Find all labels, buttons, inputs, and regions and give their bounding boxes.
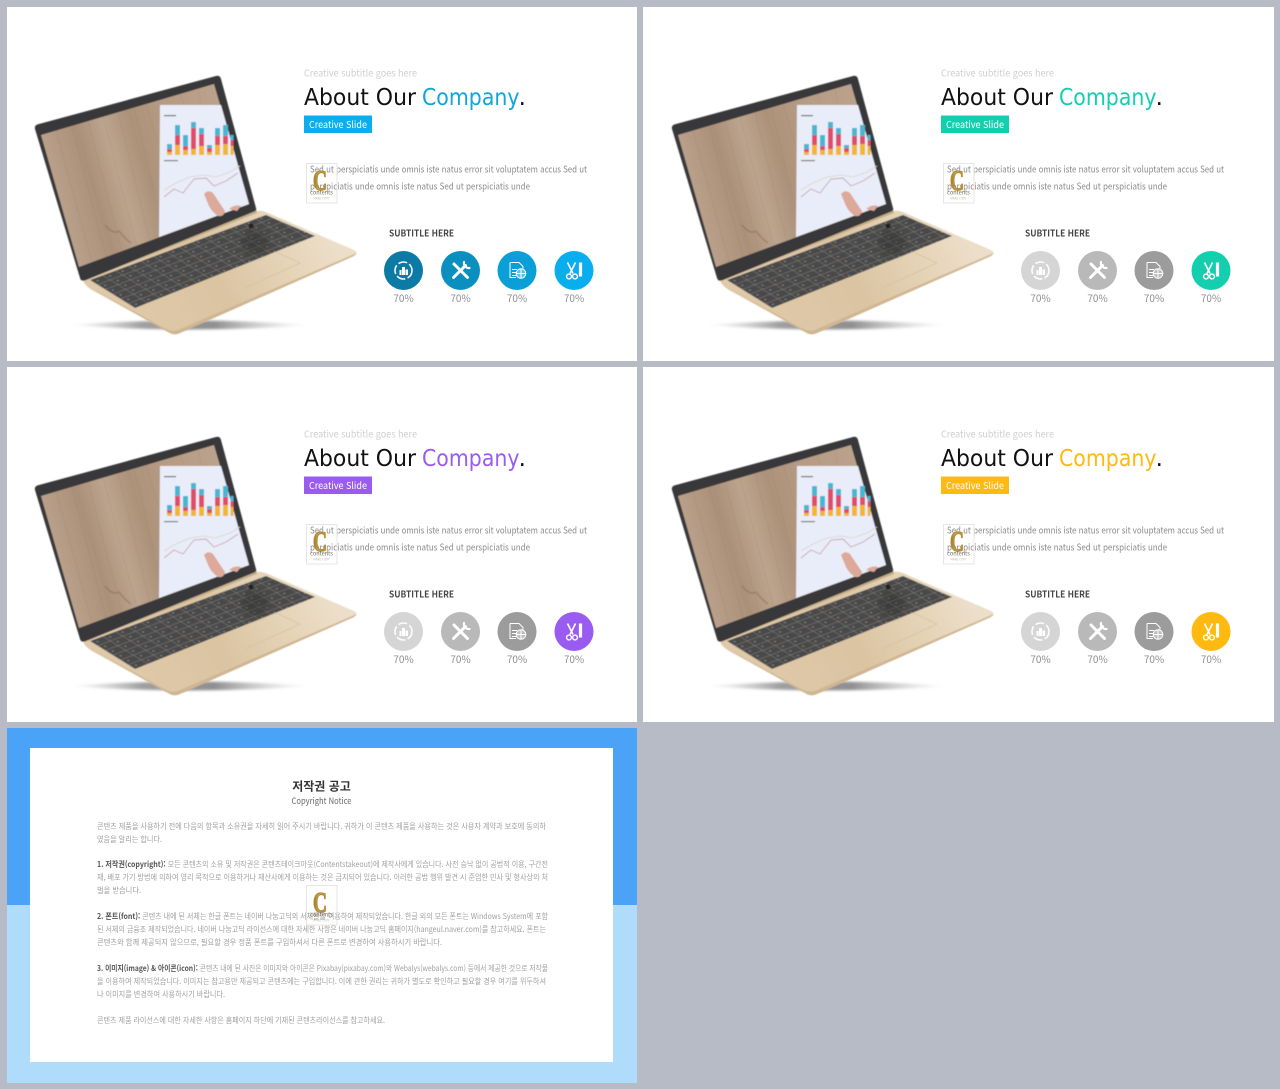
- icon: scissors: [1192, 251, 1230, 305]
- icon: scissors: 70%: [1201, 651, 1221, 666]
- heading: [941, 83, 1163, 111]
- notice section 2: [97, 911, 548, 948]
- notice section 3: 3. 이미지(image) & 아이콘(icon): 콘텐츠 내에 된 사진은 이미지와 아이콘은 Pixabay(pixabay.com)와 Webalys(webalys.com) 등에서 제공한 것으로 저작물: [97, 963, 548, 974]
- icon: document globe: 70%: [507, 290, 527, 305]
- subheading: SUBTITLE HERE: [389, 226, 454, 240]
- heading: .: [1156, 83, 1163, 111]
- icon: tools: 70%: [450, 651, 471, 666]
- notice section 1: 1. 저작권(copyright): 모든 콘텐츠의 소유 및 저작권은 콘텐츠테이크아웃(Contentstakeout)에 제작사에게 있습니다. 사전 승낙 없이 공법적 이용, 구간전: [97, 859, 548, 870]
- notice subtitle: Copyright Notice: [292, 795, 352, 807]
- heading: [304, 83, 526, 111]
- heading: About Our: [304, 83, 416, 111]
- heading: Company: [1059, 83, 1157, 111]
- notice section 2: 콘텐츠와 함께 제공되지 않으므로, 필요할 경우 정품 폰트를 구입하셔서 다른 폰트로 변경하여 사용하시기 바랍니다.: [97, 937, 442, 948]
- panel: copyright notice slide: [7, 728, 637, 1083]
- watermark logo: [944, 524, 974, 564]
- icon: chart growth: 70%: [1030, 290, 1051, 305]
- subheading: SUBTITLE HERE: [1025, 226, 1090, 240]
- watermark logo: [306, 164, 337, 203]
- notice section 2: 2. 폰트(font): 콘텐츠 내에 된 서체는 한글 폰트는 네이버 나눔고딕의 서체들을 이용하여 제작되었습니다. 한글 외의 모든 폰트는 Windows System에 포함: [97, 911, 548, 922]
- body text: Sed ut perspiciatis unde omnis iste natus error sit voluptatem accus Sed ut: [947, 522, 1224, 536]
- icon: scissors: 70%: [564, 651, 584, 666]
- panel: slide 2 teal: [643, 7, 1274, 361]
- body text: perspiciatis unde omnis iste natus Sed ut perspiciatis unde: [947, 178, 1167, 192]
- icon: scissors: [554, 612, 594, 666]
- heading: Company: [422, 83, 520, 111]
- body text: Sed ut perspiciatis unde omnis iste natus error sit voluptatem accus Sed ut: [947, 162, 1224, 176]
- icon: chart growth: 70%: [393, 290, 414, 305]
- body text: perspiciatis unde omnis iste natus Sed ut perspiciatis unde: [310, 540, 530, 554]
- icon: document globe: [1134, 612, 1174, 666]
- panel: slide 1 blue: [7, 7, 637, 361]
- icon: chart growth: [384, 612, 423, 666]
- notice section 3: [97, 963, 548, 1000]
- heading: About Our: [941, 444, 1053, 472]
- subtitle: Creative subtitle goes here: [304, 66, 417, 80]
- panel: slide 4 yellow: [643, 367, 1274, 722]
- heading: Company: [1059, 444, 1157, 472]
- heading: .: [518, 444, 526, 472]
- notice intro text: 콘텐츠 제품을 사용하기 전에 다음의 항목과 소유권을 자세히 읽어 주시기 바랍니다. 귀하가 이 콘텐츠 제품을 사용하는 것은 사용자 계약과 보호에 동의하: [97, 821, 546, 832]
- icon: document globe: [498, 612, 536, 666]
- notice section 3: 을 이용하여 제작되었습니다. 이미지는 참고용만 제공되고 콘텐츠에는 구입합니다. 이에 관한 권리는 귀하가 별도로 확인하고 필요할 경우 여기를 위두하셔: [97, 976, 546, 987]
- icon: tools: 70%: [1087, 651, 1108, 666]
- laptop illustration: [35, 437, 357, 695]
- body text: [310, 522, 587, 554]
- watermark logo: [306, 524, 337, 564]
- body text: perspiciatis unde omnis iste natus Sed ut perspiciatis unde: [947, 540, 1167, 554]
- icon: tools: [441, 612, 480, 666]
- heading: About Our: [304, 444, 416, 472]
- watermark logo: [306, 886, 337, 925]
- notice section 2: 된 서체의 금융조 제작되었습니다. 네이버 나눔고딕 라이선스에 대한 자세한 사항은 네이버 나눔고딕 홈페이지(hangeul.naver.com)를 참고하세요. 폰트는: [97, 924, 546, 935]
- heading: [304, 444, 526, 472]
- icon: tools: 70%: [1087, 290, 1108, 305]
- body text: [947, 162, 1224, 192]
- subtitle: Creative subtitle goes here: [304, 426, 417, 440]
- laptop illustration: [672, 76, 994, 334]
- notice section 1: 벌을 받습니다.: [97, 885, 141, 896]
- notice title: 저작권 공고: [292, 778, 351, 794]
- badge: Creative Slide: [946, 117, 1004, 131]
- body text: [310, 162, 587, 192]
- body text: [947, 522, 1224, 554]
- icon: scissors: 70%: [564, 290, 584, 305]
- icon: document globe: 70%: [1144, 651, 1164, 666]
- badge: Creative Slide: [309, 117, 367, 131]
- heading: Company: [422, 444, 520, 472]
- icon: chart growth: 70%: [1030, 651, 1051, 666]
- icon: document globe: [1134, 251, 1174, 305]
- subheading: SUBTITLE HERE: [389, 588, 454, 600]
- notice section 1: 재, 배포 가기 방법에 의하여 영리 목적으로 이용하거나 재산사에게 이용하는 것은 금지되어 있습니다. 이러한 공법 행위 발견 시 준엄한 민사 및 형사상의 처: [97, 872, 548, 883]
- subtitle: Creative subtitle goes here: [941, 426, 1054, 440]
- laptop illustration: [672, 437, 994, 695]
- subtitle: Creative subtitle goes here: [941, 66, 1054, 80]
- icon: document globe: [498, 251, 536, 305]
- icon: document globe: 70%: [507, 651, 527, 666]
- heading: About Our: [941, 83, 1053, 111]
- icon: tools: 70%: [450, 290, 471, 305]
- icon: scissors: [554, 251, 594, 305]
- icon: chart growth: [1021, 612, 1060, 666]
- icon: tools: [1078, 612, 1117, 666]
- badge: Creative Slide: [946, 478, 1004, 492]
- heading: [941, 444, 1163, 472]
- notice closing line: 콘텐츠 제품 라이선스에 대한 자세한 사항은 홈페이지 하단에 기재된 콘텐츠라이선스를 참고하세요.: [97, 1015, 385, 1026]
- icon: chart growth: [1021, 251, 1060, 305]
- icon: tools: [1078, 251, 1117, 305]
- body text: Sed ut perspiciatis unde omnis iste natus error sit voluptatem accus Sed ut: [310, 162, 587, 176]
- icon: chart growth: [384, 251, 423, 305]
- icon: scissors: [1192, 612, 1230, 666]
- notice intro text: 였음을 알리는 합니다.: [97, 834, 162, 845]
- panel: slide 3 purple: [7, 367, 637, 722]
- icon: chart growth: 70%: [393, 651, 414, 666]
- notice intro text: [97, 821, 546, 845]
- watermark logo: [944, 164, 974, 203]
- subheading: SUBTITLE HERE: [1025, 588, 1090, 600]
- icon: tools: [441, 251, 480, 305]
- icon: scissors: 70%: [1201, 290, 1221, 305]
- heading: .: [1156, 444, 1163, 472]
- badge: Creative Slide: [309, 478, 367, 492]
- body text: perspiciatis unde omnis iste natus Sed ut perspiciatis unde: [310, 178, 530, 192]
- icon: document globe: 70%: [1144, 290, 1164, 305]
- notice section 3: 나 이미지를 변경하여 사용하시기 바랍니다.: [97, 989, 225, 1000]
- body text: Sed ut perspiciatis unde omnis iste natus error sit voluptatem accus Sed ut: [310, 522, 587, 536]
- laptop illustration: [35, 76, 357, 334]
- heading: .: [518, 83, 526, 111]
- notice section 1: [97, 859, 548, 896]
